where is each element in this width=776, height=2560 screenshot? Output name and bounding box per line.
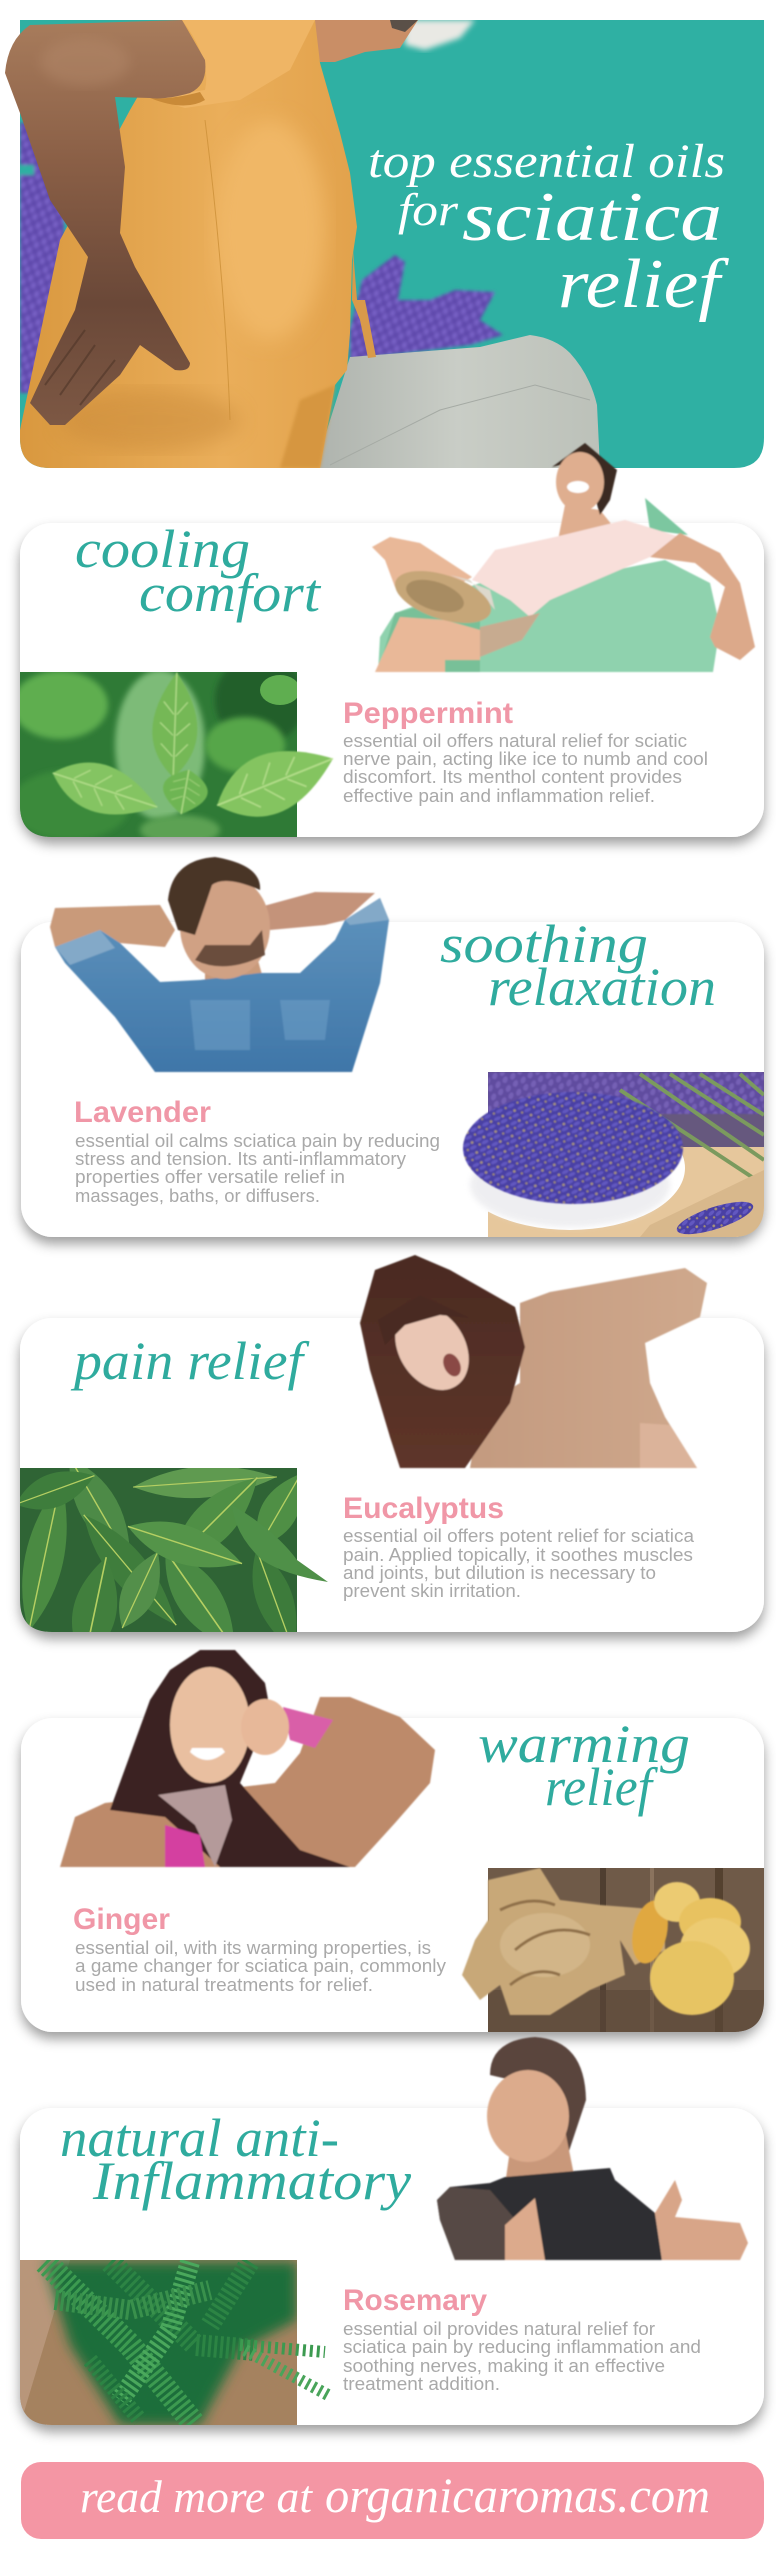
- hero hair and face: [310, 20, 475, 62]
- panel: warming relief: [21, 1650, 764, 2032]
- section heading: warming: [478, 1714, 690, 1774]
- description: stress and tension. Its anti-inflammatory: [75, 1149, 406, 1169]
- description: essential oil calms sciatica pain by reducing: [75, 1131, 440, 1151]
- description: essential oil offers potent relief for sciatica: [343, 1526, 695, 1546]
- section heading: relaxation: [488, 957, 716, 1017]
- description: soothing nerves, making it an effective: [343, 2356, 665, 2376]
- photo: smiling woman in fleece coat: [60, 1650, 435, 1867]
- hero arm and hand: [5, 20, 205, 425]
- oil name: Peppermint: [343, 697, 513, 730]
- section heading: pain relief: [70, 1331, 310, 1391]
- oil name: Lavender: [74, 1096, 211, 1129]
- section heading: cooling: [75, 519, 250, 579]
- hero pants: [315, 335, 600, 468]
- description: [343, 731, 708, 806]
- panel: soothing relaxation: [21, 857, 764, 1241]
- banner text: read more at: [80, 2471, 313, 2522]
- description: massages, baths, or diffusers.: [75, 1186, 320, 1206]
- description: effective pain and inflammation relief.: [343, 786, 655, 806]
- photo: woman with back pain: [360, 1255, 707, 1468]
- section heading: [440, 914, 716, 1017]
- banner background: [21, 2462, 764, 2539]
- section heading: Inflammatory: [92, 2151, 411, 2211]
- hero necklace: [352, 250, 376, 358]
- section heading: comfort: [139, 563, 322, 623]
- description: discomfort. Its menthol content provides: [343, 767, 682, 787]
- photo: ginger root and slices: [462, 1868, 764, 2032]
- description: [343, 2319, 701, 2394]
- photo: man relaxing in denim: [50, 857, 389, 1072]
- section heading: natural anti-: [60, 2108, 339, 2168]
- photo: eucalyptus leaves: [20, 1468, 328, 1632]
- hero title: for: [398, 184, 459, 235]
- hero title: relief: [558, 246, 730, 323]
- card background: [21, 922, 764, 1237]
- description: treatment addition.: [343, 2374, 500, 2394]
- hero orange shirt: [20, 20, 357, 468]
- section heading: [75, 519, 322, 623]
- panel: pain relief: [10, 1255, 764, 1667]
- oil name: Ginger: [73, 1903, 170, 1936]
- description: prevent skin irritation.: [343, 1581, 521, 1601]
- section heading: relief: [545, 1757, 659, 1817]
- section heading: soothing: [440, 914, 648, 974]
- photo: peppermint leaves: [20, 672, 334, 837]
- description: essential oil provides natural relief for: [343, 2319, 655, 2339]
- description: sciatica pain by reducing inflammation and: [343, 2337, 701, 2357]
- card background: [20, 523, 764, 837]
- description: properties offer versatile relief in: [75, 1167, 345, 1187]
- description: [343, 1526, 695, 1601]
- section heading: [478, 1714, 690, 1817]
- photo: man on beanbag: [372, 443, 755, 672]
- photo: woman stretching: [437, 2037, 748, 2260]
- hero teal background: [20, 20, 764, 468]
- description: and joints, but dilution is necessary to: [343, 1563, 656, 1583]
- oil name: Rosemary: [343, 2284, 487, 2317]
- hero title: sciatica: [462, 179, 722, 256]
- description: essential oil, with its warming properties, is: [75, 1938, 431, 1958]
- oil name: Eucalyptus: [343, 1492, 504, 1525]
- description: nerve pain, acting like ice to numb and cool: [343, 749, 708, 769]
- panel: cooling comfort: [10, 443, 764, 845]
- card background: [20, 2108, 764, 2425]
- card background: [20, 1318, 764, 1632]
- banner text: organicaromas.com: [325, 2467, 710, 2523]
- card background: [21, 1718, 764, 2032]
- section heading: [60, 2108, 411, 2211]
- panel: call to action: [21, 2462, 764, 2539]
- photo: lavender in a bowl: [455, 1072, 764, 1241]
- description: [75, 1938, 446, 1995]
- description: [75, 1131, 440, 1206]
- hero lavender flowers behind the person: [20, 123, 503, 393]
- description: used in natural treatments for relief.: [75, 1975, 373, 1995]
- banner text: [80, 2467, 710, 2523]
- description: a game changer for sciatica pain, commonly: [75, 1956, 446, 1976]
- photo: rosemary sprigs: [20, 2260, 328, 2425]
- panel: natural anti-inflammatory: [20, 2037, 764, 2425]
- description: pain. Applied topically, it soothes muscles: [343, 1545, 693, 1565]
- hero title: [368, 135, 730, 323]
- panel: hero header: [5, 20, 764, 468]
- hero title: top essential oils: [368, 135, 725, 188]
- hero sleeve: [150, 20, 315, 108]
- description: essential oil offers natural relief for sciatic: [343, 731, 687, 751]
